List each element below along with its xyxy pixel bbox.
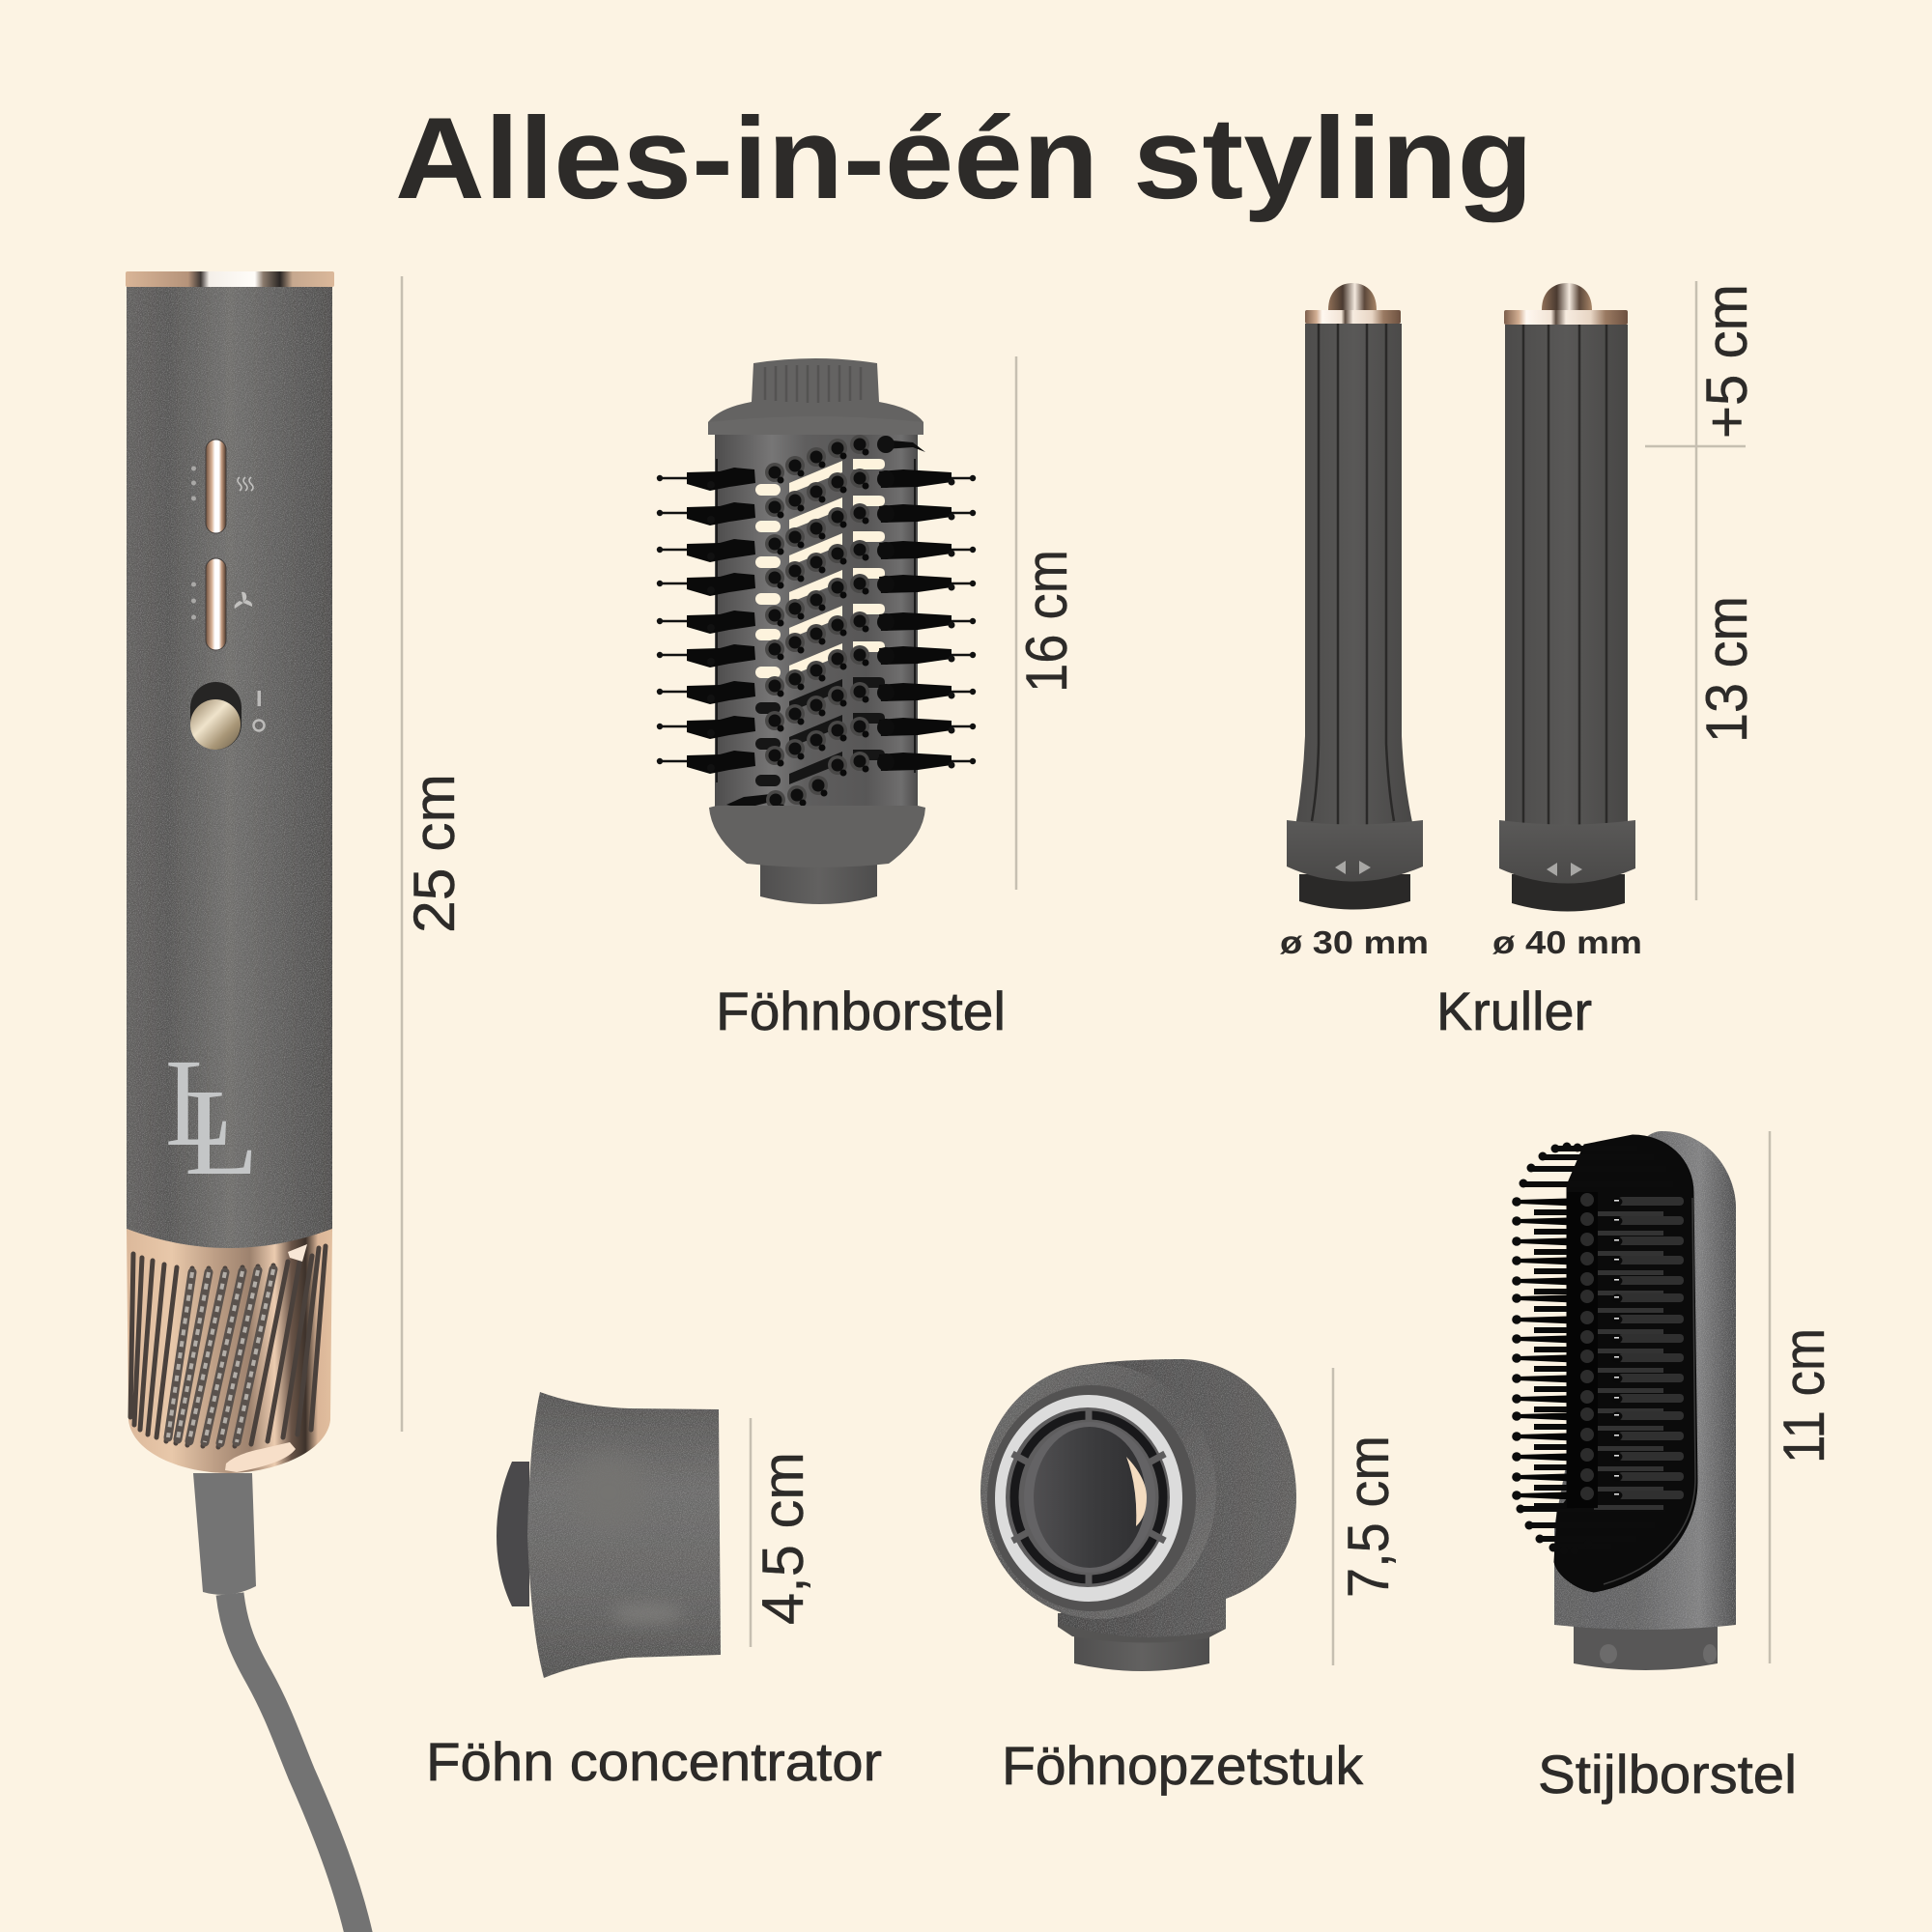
dimension: curler lengths: 13 cm (1694, 596, 1759, 743)
brush top cap (708, 358, 923, 435)
curler barrel (1295, 324, 1413, 827)
curler barrel (1505, 325, 1628, 827)
attachment: 30 mm curler (1287, 283, 1423, 910)
nozzle body (1058, 1359, 1296, 1637)
nozzle face (980, 1364, 1216, 1619)
concentrator back ring (497, 1462, 529, 1606)
brand logo LL: L (185, 1065, 259, 1201)
brush housing (1554, 1131, 1736, 1630)
white ring (995, 1395, 1182, 1602)
vent ring (1006, 1407, 1170, 1587)
label: Föhnopzetstuk: Föhnopzetstuk (1002, 1735, 1364, 1796)
barrel grooves (1523, 325, 1606, 825)
attachment: straightening brush (1512, 1131, 1736, 1670)
brush panel (1554, 1135, 1697, 1592)
diameter label 40 mm: ø 40 mm (1492, 924, 1642, 960)
heat button with indicators (191, 440, 253, 533)
brush neck (1574, 1618, 1718, 1670)
attachment: 40 mm curler (1499, 283, 1635, 912)
label: Föhnborstel: Föhnborstel (716, 980, 1006, 1041)
barrel grooves (1312, 324, 1394, 825)
brand logo LL (165, 1034, 259, 1201)
curler collar (1499, 820, 1635, 912)
curler tip (1305, 283, 1401, 324)
rose gold vented base (127, 1229, 332, 1473)
brush base (709, 806, 925, 904)
handle body (127, 286, 332, 1251)
dimension: nozzle height: 7,5 cm (1336, 1435, 1401, 1598)
attachment: concentrator nozzle (497, 1392, 721, 1678)
dimension: wand height: 25 cm (402, 774, 467, 933)
attachment: round blow brush (657, 358, 976, 904)
fan button with indicators (191, 558, 252, 650)
label: Föhn concentrator: Föhn concentrator (426, 1731, 882, 1792)
power switch (190, 682, 265, 750)
nozzle rim (987, 1385, 1196, 1611)
curler tip (1504, 283, 1628, 325)
concentrator highlights (570, 1454, 684, 1623)
main styler with cord (126, 271, 360, 1932)
curler collar (1287, 820, 1423, 910)
nozzle neck (1058, 1613, 1226, 1671)
brush bristles (1512, 1142, 1684, 1555)
label: Kruller: Kruller (1436, 980, 1592, 1041)
dimension: concentrator height: 4,5 cm (751, 1452, 815, 1625)
concentrator body (527, 1392, 721, 1678)
title: Alles-in-één styling (395, 94, 1533, 223)
label: Stijlborstel: Stijlborstel (1538, 1744, 1797, 1804)
dimension: curler lengths: +5 cm (1694, 284, 1759, 439)
power cord (193, 1473, 360, 1932)
diameter label 30 mm: ø 30 mm (1280, 924, 1429, 960)
brush bristles (657, 435, 976, 811)
central airway (1024, 1422, 1155, 1573)
brand logo LL: L (165, 1034, 233, 1173)
dimension: curler lengths (1645, 281, 1759, 900)
attachment: blow-dry nozzle (980, 1359, 1296, 1671)
dimension: straightening brush height: 11 cm (1772, 1328, 1836, 1463)
brush barrel (715, 435, 918, 808)
airflow slots (755, 459, 885, 786)
top metal ring (126, 271, 334, 287)
dimension: brush height: 16 cm (1014, 550, 1079, 693)
